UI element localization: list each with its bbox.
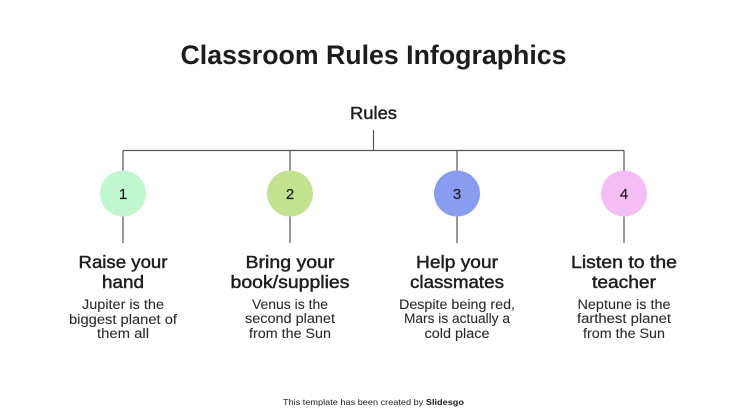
tree connector lines [123, 130, 624, 243]
heading: Help your classmates [410, 252, 504, 292]
description: Jupiter [69, 297, 177, 341]
description: Neptune: farthest planet [577, 311, 671, 326]
panel: rule 2 [230, 170, 350, 341]
heading: Help your classmates: classmates [410, 272, 504, 292]
description: Venus: from the Sun [249, 326, 331, 341]
heading: Bring your book/supplies: Bring your [246, 252, 335, 272]
heading: Raise your hand: Raise your [78, 252, 168, 272]
number circle 3: 3 [453, 186, 461, 203]
description: Mars [399, 297, 515, 341]
description: Neptune: from the Sun [583, 326, 665, 341]
root label: Rules: Rules [350, 103, 397, 123]
number circle 2 [267, 170, 313, 216]
description: Neptune [577, 297, 671, 341]
description: Venus: Venus is the [252, 297, 328, 312]
footer credit: This template has been created by Slidesgo [283, 397, 464, 407]
number circle 4 [601, 170, 647, 216]
panel: rule 4 [571, 170, 677, 341]
heading: Bring your book/supplies: book/supplies [230, 272, 350, 292]
description: Jupiter: Jupiter is the [82, 297, 164, 312]
title: Classroom Rules Infographics [180, 40, 566, 70]
description: Jupiter: biggest planet of [69, 312, 177, 327]
description: Venus [245, 297, 335, 341]
heading: Raise your hand: hand [102, 272, 144, 292]
number circle 1 [100, 170, 146, 216]
description: Mars: Despite being red, [399, 297, 515, 312]
heading: Listen to the teacher: teacher [592, 272, 656, 292]
panel: rule 3 [399, 170, 515, 341]
heading: Listen to the teacher [571, 252, 677, 292]
number circle 2: 2 [286, 186, 294, 203]
heading: Bring your book/supplies [230, 252, 350, 292]
number circle 4: 4 [620, 186, 628, 203]
description: Mars: Mars is actually a [404, 311, 510, 326]
panel: rule 1 [69, 170, 177, 341]
description: Venus: second planet [245, 311, 335, 326]
heading: Help your classmates: Help your [416, 252, 498, 272]
description: Neptune: Neptune is the [578, 297, 670, 312]
description: Mars: cold place [424, 326, 490, 341]
heading: Listen to the teacher: Listen to the [571, 252, 677, 272]
heading: Raise your hand [78, 252, 168, 292]
number circle 1: 1 [119, 186, 127, 203]
description: Jupiter: them all [97, 326, 149, 341]
number circle 3 [434, 170, 480, 216]
